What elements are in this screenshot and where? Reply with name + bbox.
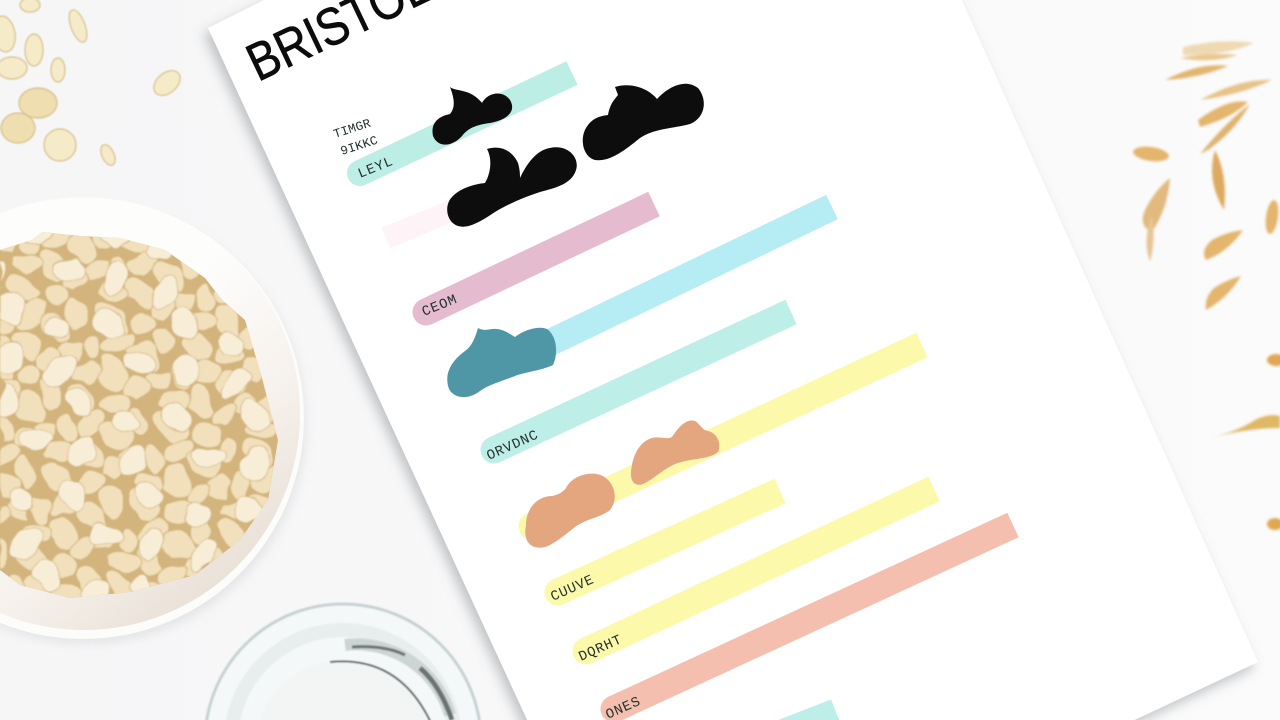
stool shape: black small (432, 87, 512, 145)
label: bar 6: CUUVE (549, 572, 597, 606)
bar 3: blue (520, 207, 832, 357)
stool shape: teal (447, 328, 556, 397)
oat grains right side (1132, 41, 1280, 530)
label above bar 1: TIMGR (332, 116, 373, 142)
bar 1: teal (347, 73, 572, 186)
stool shape: black large (583, 84, 704, 160)
bar 9: teal partial (700, 712, 836, 720)
faded bar (386, 203, 470, 238)
water glass (205, 604, 481, 720)
label above bar 1 (332, 116, 380, 159)
bar 4: teal (480, 312, 791, 464)
rolled oats (0, 225, 290, 605)
bar 6: yellow (544, 491, 780, 606)
label: bar 4: ORVDNC (485, 427, 541, 465)
bar 7: yellow (572, 489, 934, 664)
oat bowl (0, 197, 306, 644)
bar 8: salmon (600, 525, 1013, 720)
stool shape: orange right (631, 420, 719, 485)
bar 2: pink (412, 204, 654, 326)
stool shape: black middle (447, 147, 577, 227)
label: bar 2: CEOM (420, 292, 460, 321)
bar 5: yellow (518, 345, 922, 540)
label: bar 7: DQRHT (577, 632, 625, 666)
label above bar 1: 9IKKC (339, 134, 380, 159)
label: bar 1: LEYL (356, 154, 396, 183)
stool shape: orange left (525, 474, 615, 548)
scattered oat flakes (0, 0, 185, 168)
